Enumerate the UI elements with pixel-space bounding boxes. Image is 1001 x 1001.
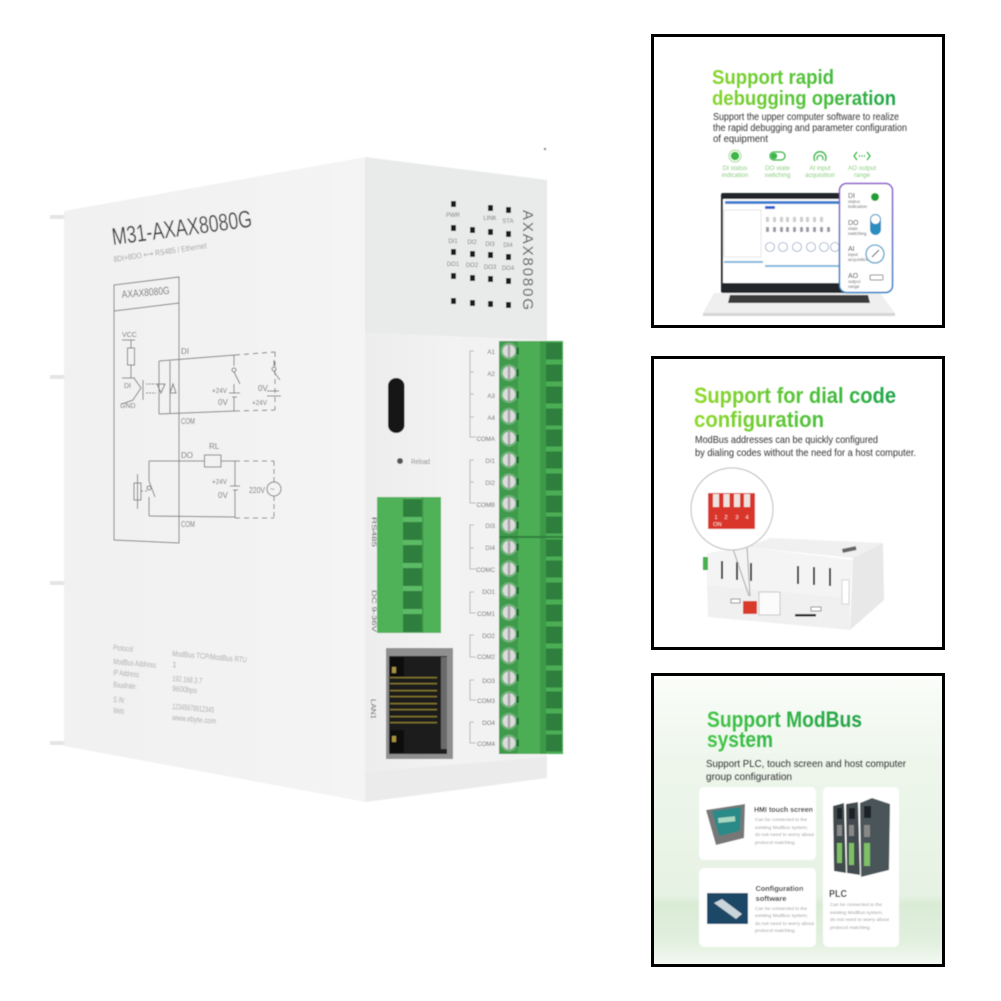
LED labels: DO2	[466, 263, 479, 269]
dip switch zoom callout	[691, 468, 773, 596]
terminal screws	[500, 342, 519, 752]
terminal labels: COM2	[477, 654, 496, 661]
card: PLC: do not need to worry about	[830, 917, 890, 923]
spec list: 1	[172, 660, 178, 669]
status card: switching	[848, 231, 867, 236]
status card: AI	[848, 246, 855, 253]
device: din-rail IO module	[50, 148, 563, 802]
diagram labels: GND	[120, 403, 136, 410]
spec list: S /N:	[113, 695, 126, 705]
card: configuration software	[699, 868, 816, 947]
card: HMI touch screen: HMI touch screen	[754, 805, 813, 814]
feature labels	[722, 165, 876, 179]
vertical model label: AXAX8080G	[519, 210, 536, 310]
diagram labels: 220V	[249, 486, 266, 495]
diagram labels: +24V	[212, 386, 227, 395]
connector side labels: DC 9-36V	[370, 590, 377, 633]
diagram labels: COM	[181, 417, 195, 426]
terminal labels: DO1	[482, 589, 496, 596]
card: HMI touch screen: Can be connected to the	[755, 817, 807, 823]
panel: rapid debugging	[652, 36, 944, 326]
terminal labels: A2	[487, 371, 496, 378]
terminal labels: A4	[487, 415, 496, 422]
card: HMI touch screen: do not need to worry about	[755, 832, 815, 838]
terminal brackets	[470, 351, 476, 743]
spec list: www.ebyte.com	[171, 713, 217, 726]
card: configuration software: Can be connected to the	[755, 906, 807, 912]
panel 3 heading: system	[707, 727, 773, 752]
card: PLC	[823, 787, 899, 947]
spec list: IP Address:	[113, 668, 141, 679]
green terminal block right	[499, 341, 563, 754]
panel: modbus system	[652, 674, 944, 966]
panel 2 body text: ModBus addresses can be quickly configured	[695, 435, 878, 446]
panel 2 heading: Support for dial code	[694, 383, 896, 408]
panel 1 heading: Support rapid	[712, 66, 834, 89]
LED labels: LINK	[483, 216, 497, 222]
LED labels: DO1	[447, 262, 460, 268]
feature labels: AI input	[809, 165, 831, 172]
panel 3 body text	[706, 759, 907, 783]
feature labels: range	[854, 172, 871, 179]
card: configuration software: Configuration	[756, 884, 804, 893]
usb-c port	[388, 378, 404, 433]
status card: DI	[848, 193, 855, 200]
terminal labels: A1	[487, 349, 496, 356]
terminal labels: COM1	[477, 611, 496, 618]
dip switch zoom callout: 2	[724, 515, 728, 521]
connector side labels: RS485	[370, 517, 377, 548]
feature labels: switching	[765, 172, 791, 179]
panel 3 body text: group configuration	[706, 772, 792, 783]
LED labels: PWR	[446, 213, 461, 219]
card: HMI touch screen: protocol matching.	[755, 840, 796, 846]
terminal labels: A3	[487, 393, 496, 400]
dip switch zoom callout: 1	[714, 515, 718, 521]
terminal labels: DI3	[485, 523, 496, 530]
card: HMI touch screen: existing ModBus system,	[755, 825, 808, 831]
panel 1 body text: of equipment	[713, 134, 768, 145]
terminal labels: COMC	[476, 567, 496, 574]
card: configuration software: do not need to worry about	[755, 921, 815, 927]
diagram labels: DI	[181, 347, 189, 356]
mounting clips	[50, 215, 65, 745]
feature labels: DO state	[765, 165, 790, 172]
terminal sockets	[546, 342, 562, 752]
panel 1 heading	[712, 66, 896, 110]
diagram labels: ~	[270, 485, 275, 494]
model title: M31-AXAX8080G	[110, 206, 254, 251]
status card: status	[848, 199, 861, 204]
LED labels: STA	[502, 219, 514, 225]
card: HMI touch screen	[699, 787, 816, 860]
terminal labels: DO4	[482, 720, 496, 727]
terminal labels: DO3	[482, 678, 496, 685]
feature labels: indication	[722, 172, 749, 179]
panel 3 heading	[707, 707, 862, 752]
panel 3 body text: Support PLC, touch screen and host computer	[706, 759, 907, 770]
card: PLC: PLC	[829, 889, 847, 900]
diagram labels: +24V	[212, 477, 227, 486]
spec list: 9600bps	[172, 684, 198, 695]
green power/RS485 connector	[377, 497, 441, 633]
panel 1 body text	[713, 112, 907, 145]
device front face top	[365, 157, 547, 340]
connector side labels	[370, 517, 377, 633]
status card	[840, 184, 892, 292]
spec list: 192.168.3.7	[172, 674, 203, 686]
LED labels: DI3	[485, 242, 495, 248]
spec list	[113, 643, 247, 726]
status card: indication	[848, 204, 868, 209]
panel 1 heading: debugging operation	[712, 87, 896, 110]
status card: range	[848, 284, 860, 289]
device bottom lip	[365, 757, 547, 802]
terminal labels: DI1	[485, 458, 496, 465]
feature labels: acquisition	[805, 172, 835, 179]
panel 2 body text: by dialing codes without the need for a host computer.	[695, 448, 916, 459]
card: configuration software: software	[756, 894, 786, 903]
panel 2 heading	[694, 383, 896, 432]
LAN label: LAN1	[369, 699, 376, 719]
status card: state	[848, 226, 858, 231]
panel: dial code	[652, 358, 944, 648]
LED labels: DI1	[448, 239, 458, 245]
reload label: Reload	[411, 459, 430, 466]
panel 1 body text: the rapid debugging and parameter configuration	[713, 123, 907, 134]
diagram labels: 0V	[258, 384, 268, 393]
diagram labels	[120, 285, 275, 529]
terminal labels: COMB	[476, 502, 495, 509]
spec list: ModBus Address:	[113, 657, 157, 670]
diagram labels: +24V	[252, 398, 267, 407]
diagram labels: VCC	[122, 332, 137, 339]
LED indicator grid	[451, 201, 511, 308]
card: PLC: Can be connected to the	[830, 902, 882, 908]
spec list: ModBus TCP/ModBus RTU	[172, 649, 247, 665]
diagram labels: COM	[181, 520, 195, 529]
diagram labels: DI	[124, 383, 131, 390]
panel 2 body text	[695, 435, 916, 459]
diagram labels: 0V	[218, 491, 228, 500]
status card: AO	[848, 273, 859, 280]
wiring diagram	[114, 277, 281, 543]
panel 2 heading: configuration	[694, 407, 824, 432]
ethernet port	[386, 648, 453, 759]
card: PLC: protocol matching.	[830, 925, 871, 931]
terminal labels: DO2	[482, 633, 496, 640]
terminal labels: DI4	[485, 545, 496, 552]
stray mark	[544, 148, 546, 150]
terminal labels: COM4	[477, 741, 496, 748]
spec list: 12345678912345	[172, 702, 215, 715]
subtitle: 8DI+8DO ⟷ RS485 / Ethernet	[113, 241, 208, 264]
terminal labels: COMA	[476, 436, 496, 443]
LED labels: DO4	[502, 266, 515, 272]
LED labels	[446, 213, 515, 272]
dip switch zoom callout: ON	[713, 522, 722, 528]
device side face	[64, 157, 366, 802]
laptop	[703, 193, 895, 316]
feature labels: DI status	[723, 165, 747, 172]
status card: acquisition	[848, 257, 870, 262]
terminal labels: DI2	[485, 480, 496, 487]
card: configuration software: existing ModBus system,	[755, 913, 808, 919]
feature icons	[729, 150, 870, 162]
terminal labels	[476, 349, 496, 748]
spec list: Web:	[113, 706, 126, 716]
status card: output	[848, 279, 861, 284]
LED labels: DO3	[484, 265, 497, 271]
diagram labels: RL	[209, 442, 220, 451]
LED labels: DI2	[467, 240, 477, 246]
spec list: Baudrate:	[113, 680, 138, 691]
terminal labels: COM3	[477, 698, 496, 705]
spec list: Protocol:	[113, 643, 135, 654]
diagram labels: 0V	[218, 398, 228, 407]
dip switch zoom callout: 3	[735, 515, 739, 521]
device illustration	[703, 538, 884, 630]
reload button	[397, 458, 403, 464]
card: configuration software: protocol matching.	[755, 928, 796, 934]
diagram labels: AXAX8080G	[121, 285, 170, 301]
status card: input	[848, 252, 859, 257]
feature labels: AO output	[848, 165, 876, 172]
panel 1 body text: Support the upper computer software to realize	[713, 112, 899, 123]
LED labels: DI4	[503, 243, 513, 249]
card: PLC: existing ModBus system,	[830, 910, 883, 916]
status card: DO	[848, 220, 859, 227]
diagram labels: DO	[181, 451, 193, 460]
dip switch zoom callout: 4	[745, 515, 749, 521]
panel 3 heading: Support ModBus	[707, 707, 862, 732]
device front face lower	[365, 333, 547, 802]
